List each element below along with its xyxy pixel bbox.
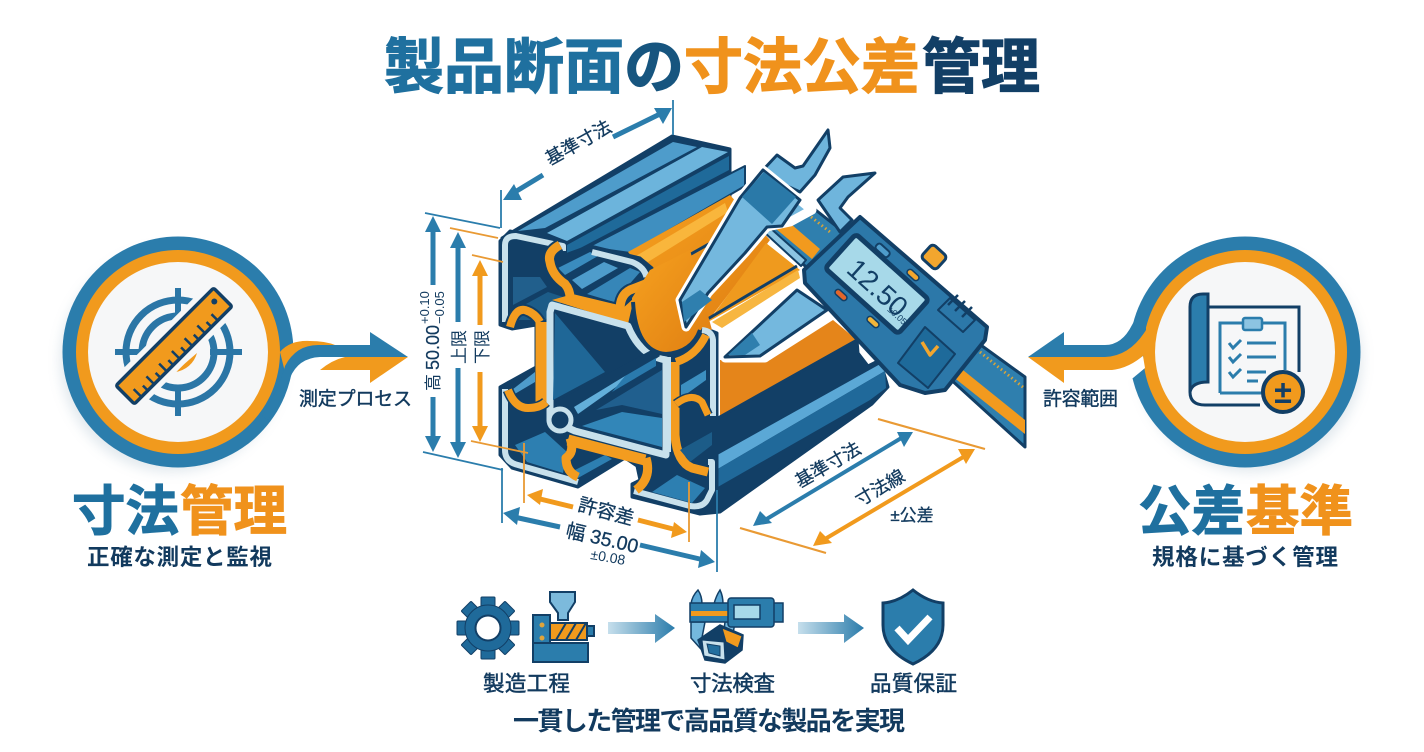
- dimension: height: 高: [424, 374, 443, 391]
- dimension: height: −0.05: [432, 291, 447, 324]
- boss: [632, 250, 712, 353]
- dimension: lower limit: 下限: [473, 330, 492, 364]
- subheading: tolerance standards: 規格に基づく管理: [1152, 545, 1338, 570]
- display readout: 12.50: [841, 253, 914, 323]
- icon: inspection caliper: [690, 590, 783, 663]
- heading: tolerance standards: [1138, 482, 1353, 542]
- icon: extrusion machine: [533, 592, 594, 662]
- title: 製品断面: [384, 34, 624, 101]
- caliper: [680, 130, 1025, 447]
- icon: target and ruler: [115, 288, 242, 416]
- top left chamber: [513, 277, 547, 305]
- title: の: [624, 34, 684, 101]
- dimension: width: [502, 468, 717, 572]
- dimension: base length top: 基準寸法: [542, 117, 615, 169]
- profile top faces: [502, 136, 745, 270]
- arrow: step one: [608, 614, 675, 643]
- circle badge: right: [1130, 236, 1362, 472]
- arrow: measurement process: [262, 332, 408, 420]
- dimension: tolerance width: 許容差: [576, 494, 636, 530]
- dimension: height: +0.10: [417, 291, 432, 324]
- lower chambers: [515, 432, 567, 473]
- profile lower flange: [700, 340, 888, 514]
- title: 管理: [922, 34, 1040, 101]
- panel: tolerance standards: [1028, 236, 1362, 570]
- profile orange side: [628, 195, 857, 418]
- central chamber: [550, 305, 666, 455]
- icon: quality shield: [883, 590, 943, 664]
- caliper digital display: [804, 217, 987, 393]
- dimension: height: 50.00: [423, 325, 443, 370]
- tagline: 一貫した管理で高品質な製品を実現: [513, 706, 905, 736]
- dimension: height: [417, 213, 503, 470]
- extruded profile: [500, 136, 888, 514]
- heading: dimension management: 寸法: [72, 482, 179, 542]
- heading: tolerance standards: 基準: [1246, 482, 1353, 542]
- dimension: upper limit: 上限: [450, 330, 469, 364]
- dimension: lower limit: [471, 255, 689, 542]
- label: dimension inspection: 寸法検査: [690, 672, 775, 696]
- dimension lines: [417, 100, 985, 572]
- dimension: width: ±0.08: [589, 546, 627, 568]
- icon: gear: [457, 597, 519, 659]
- icon: tolerance document: ±: [1274, 374, 1292, 410]
- caliper beam: [764, 170, 1025, 447]
- arrow: tolerance range: [1028, 300, 1146, 383]
- heading: dimension management: 管理: [180, 482, 287, 542]
- heading: dimension management: [72, 482, 287, 542]
- dimension: base length top: [501, 100, 673, 228]
- icon: tolerance document: [1190, 294, 1303, 412]
- top center chamber: [565, 250, 640, 305]
- heading: tolerance standards: 公差: [1138, 482, 1245, 542]
- title: [384, 34, 1040, 101]
- label: measurement process: 測定プロセス: [299, 388, 412, 410]
- label: tolerance range: 許容範囲: [1043, 388, 1118, 410]
- panel: dimension management: [60, 236, 412, 570]
- caliper digital display: ±0.05: [885, 304, 909, 327]
- caliper jaws: [680, 130, 875, 358]
- dimension: base length bottom: 基準寸法: [792, 438, 864, 492]
- dimension: width: 幅 35.00: [564, 520, 641, 558]
- dimension: base length bottom: 寸法線: [852, 466, 908, 510]
- label: quality assurance: 品質保証: [870, 672, 957, 696]
- dimension: upper limit: [450, 228, 498, 458]
- label: manufacturing process: 製造工程: [483, 672, 570, 696]
- dimension: tolerance width: [527, 489, 687, 538]
- circle badge: left: [60, 236, 294, 472]
- dimension: base length bottom: [740, 419, 985, 553]
- arrow: step two: [798, 614, 864, 643]
- title: 寸法公差: [684, 34, 920, 101]
- subheading: dimension management: 正確な測定と監視: [87, 545, 272, 570]
- profile front face: [500, 231, 717, 514]
- panel: process flow: [457, 590, 957, 736]
- dimension: base length bottom: ±公差: [890, 506, 934, 525]
- right wall and chamber: [680, 342, 707, 412]
